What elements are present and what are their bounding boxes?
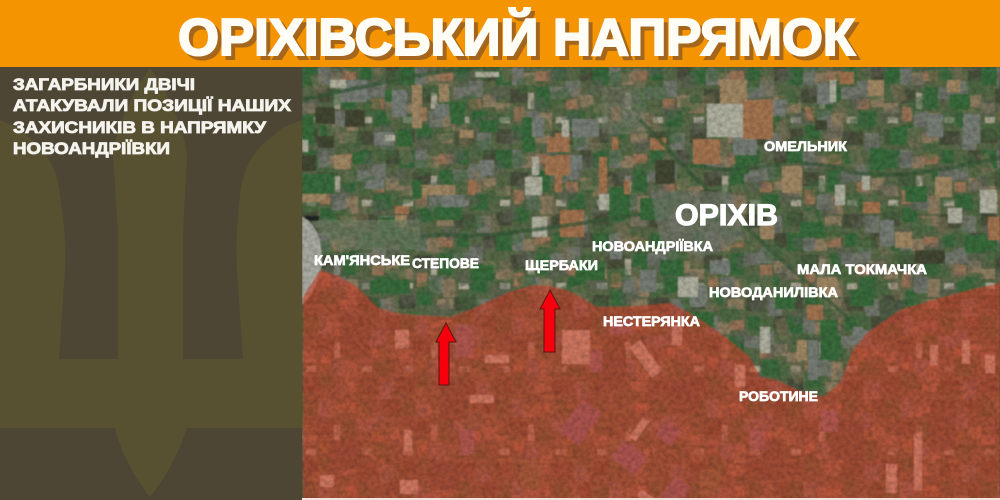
town of Orikhiv — [650, 190, 745, 258]
southern fields under the red zone — [320, 300, 995, 500]
orange plots — [395, 72, 1000, 320]
label: Shcherbaky: ЩЕРБАКИ — [525, 257, 598, 273]
white plots — [302, 72, 997, 353]
text block: attack summary: АТАКУВАЛИ ПОЗИЦІЇ НАШИХ — [13, 97, 291, 115]
text block: attack summary: НОВОАНДРІЇВКИ — [13, 140, 170, 158]
arrow: attack toward Stepove — [436, 323, 456, 385]
lake — [305, 216, 319, 221]
text block: attack summary: ЗАХИСНИКІВ В НАПРЯМКУ — [13, 119, 267, 137]
text block: attack summary: ЗАГАРБНИКИ ДВІЧІ — [13, 76, 195, 94]
gray plots — [340, 80, 980, 380]
title: ОРІХІВСЬКИЙ НАПРЯМОК — [178, 8, 855, 67]
quarry near Kamianske — [302, 217, 322, 305]
label: Novoandriivka: НОВОАНДРІЇВКА — [592, 238, 713, 254]
tan plots — [302, 80, 960, 360]
satellite map — [302, 67, 1000, 500]
imagery grain — [302, 67, 1000, 500]
road and forest strips — [302, 68, 1000, 320]
text block: attack summary — [13, 76, 291, 158]
header bar — [0, 0, 1000, 71]
green fields — [302, 90, 985, 360]
tone correction for northern fields — [302, 67, 1000, 439]
emblem: trident watermark — [0, 68, 302, 497]
label: Kamianske: КАМ'ЯНСЬКЕ — [314, 252, 410, 268]
label: Orikhiv: ОРІХІВ — [675, 199, 778, 232]
label: Stepove: СТЕПОВЕ — [412, 255, 479, 271]
label: Omelnyk: ОМЕЛЬНИК — [764, 138, 847, 154]
label: Robotyne: РОБОТИНЕ — [739, 388, 818, 404]
title: ОРІХІВСЬКИЙ НАПРЯМОК — [182, 12, 859, 71]
left panel — [0, 67, 302, 500]
label: Nesterianka: НЕСТЕРЯНКА — [603, 313, 700, 329]
dark plots — [302, 107, 945, 264]
map labels — [314, 138, 927, 404]
label: Novodanylivka: НОВОДАНИЛІВКА — [709, 284, 838, 300]
town to the north-west of Orikhiv — [602, 87, 646, 134]
red occupied zone — [303, 270, 1000, 500]
arrow: attack toward Shcherbaky — [540, 290, 560, 352]
label: Mala Tokmachka: МАЛА ТОКМАЧКА — [797, 261, 927, 277]
